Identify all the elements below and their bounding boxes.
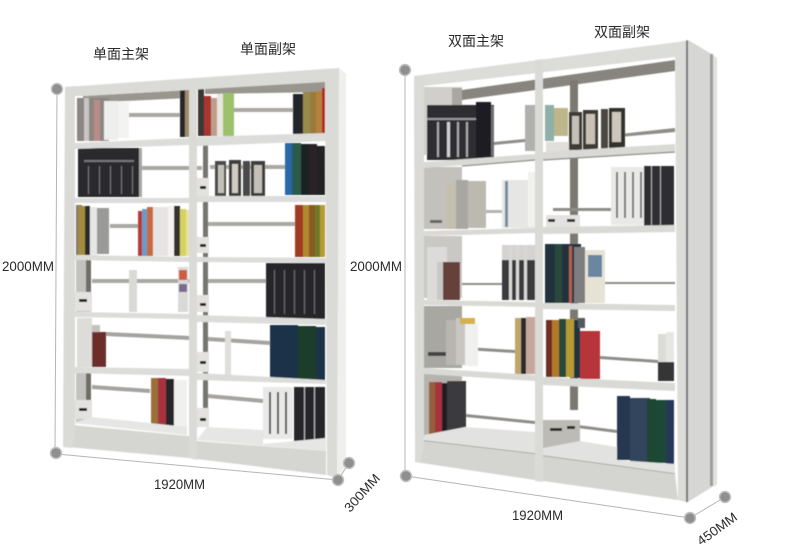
shelf undersides [424,152,675,474]
frame [414,40,688,502]
base plinth right [197,441,326,475]
label: left height: 2000MM [2,258,54,274]
back dark bands and rails [445,60,675,433]
shelves [68,133,326,475]
title: single side: 单面副架 [240,41,296,57]
side panel [337,68,346,478]
books: left bay [76,88,190,432]
books: right bay [545,105,674,464]
base plinth [68,425,189,458]
base plinth right [543,456,678,500]
label: left width: 1920MM [154,476,205,492]
base plinth [415,441,535,480]
side panel [688,40,712,502]
uprights inside [424,87,580,450]
books: left bay [427,102,536,437]
books: right bay [198,88,325,443]
uprights inside [76,145,208,425]
shelves [415,144,678,500]
label: right width: 1920MM [512,507,563,523]
title: double main: 双面主架 [448,33,504,49]
brackets [74,178,209,427]
back dark bands and rails [83,81,325,403]
panel: single-sided shelf [63,68,346,478]
label: right height: 2000MM [350,258,402,274]
label: right depth: 450MM [694,509,740,548]
title: single main: 单面主架 [93,46,149,62]
title: double side: 双面副架 [594,24,650,40]
dimension lines and dots [50,64,730,524]
panel: double-sided shelf [414,40,717,502]
frame [63,68,339,478]
label: left depth: 300MM [341,471,383,515]
